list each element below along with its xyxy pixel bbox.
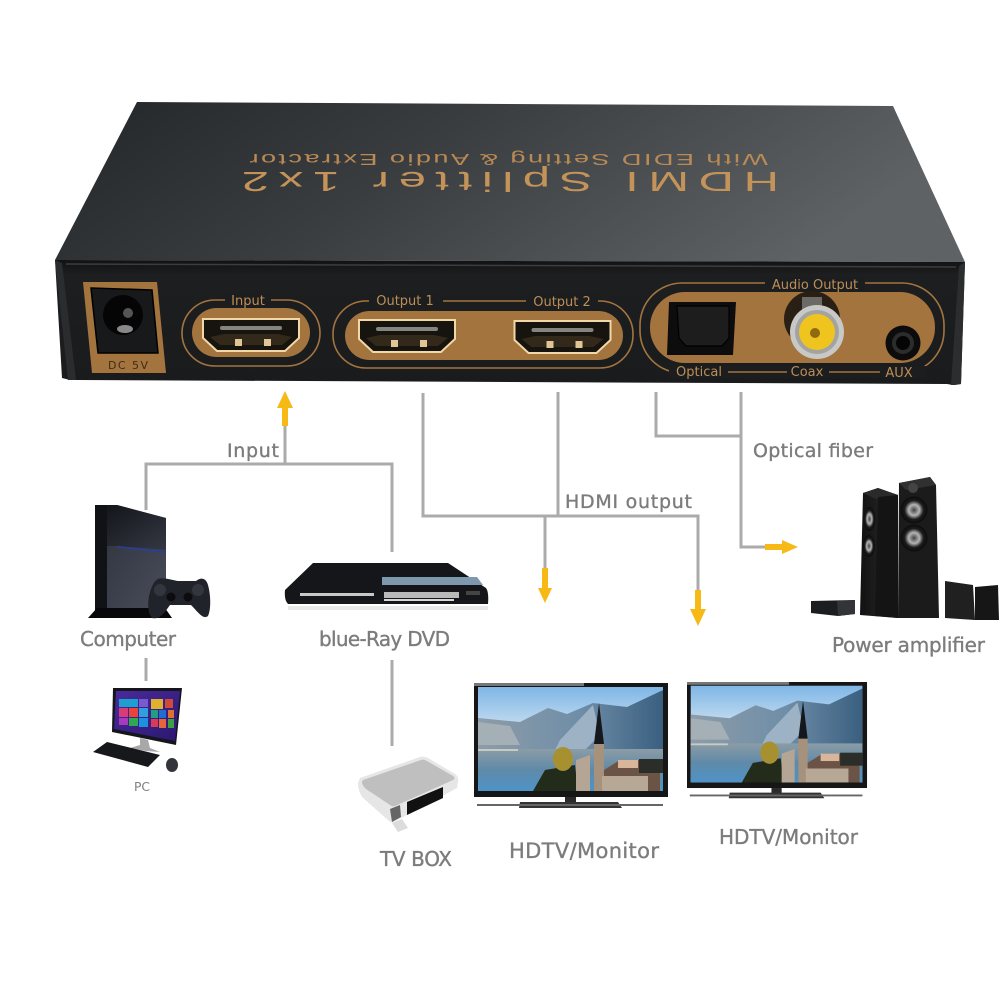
port group: Audio Output: Coax [791,365,824,380]
icon: HDTV monitor 2 [687,682,867,798]
power jack DC 5V: DC 5V [108,359,148,372]
panel: device rear face [55,260,965,385]
arrow: to input [277,391,293,426]
label: HDMI output: HDMI output [565,491,692,513]
port group: Input: Input [231,294,265,309]
label: blue-Ray DVD: blue-Ray DVD [319,627,450,651]
panel: device top face [55,102,965,262]
label: TV BOX: TV BOX [379,847,452,871]
connection lines [146,392,768,746]
port group: Output 1 and Output 2: Output 2 [533,295,591,310]
label: Computer: Computer [80,627,177,651]
arrow: to monitor 2 [690,590,706,626]
label: PC: PC [134,780,150,794]
label: HDTV/Monitor 2: HDTV/Monitor [719,825,859,849]
RCA coax port [784,291,844,359]
icon: TV box [358,757,458,832]
subheading: With EDID Setting & Audio Extractor: With EDID Setting & Audio Extractor [249,150,768,168]
port group: Audio Output [640,277,944,381]
AUX port [886,326,920,360]
label: Optical fiber: Optical fiber [753,440,873,462]
icon: PC desktop [93,688,182,772]
port group: Input [182,294,320,366]
heading: HDMI Splitter 1x2 (upside-down on device): HDMI Splitter 1x2 [242,166,779,197]
arrow: to monitor 1 [538,568,552,603]
icon: speakers [811,477,999,620]
port group: Output 1 and Output 2: Output 1 [376,294,434,309]
power jack DC 5V [83,282,166,373]
port group: Output 1 and Output 2 [333,294,633,368]
arrow: to amplifier [765,540,798,554]
label: Power amplifier: Power amplifier [832,633,986,657]
icon: blue-ray DVD player [285,563,488,610]
label: HDTV/Monitor 1: HDTV/Monitor [509,839,659,863]
label: Input: Input [227,440,279,462]
icon: HDTV monitor 1 [474,683,668,808]
port group: Audio Output: Audio Output [772,278,858,293]
optical port [667,302,736,355]
port group: Audio Output: Optical [676,365,722,380]
port group: Audio Output: AUX [885,366,913,381]
icon: game console and controller [88,505,210,618]
